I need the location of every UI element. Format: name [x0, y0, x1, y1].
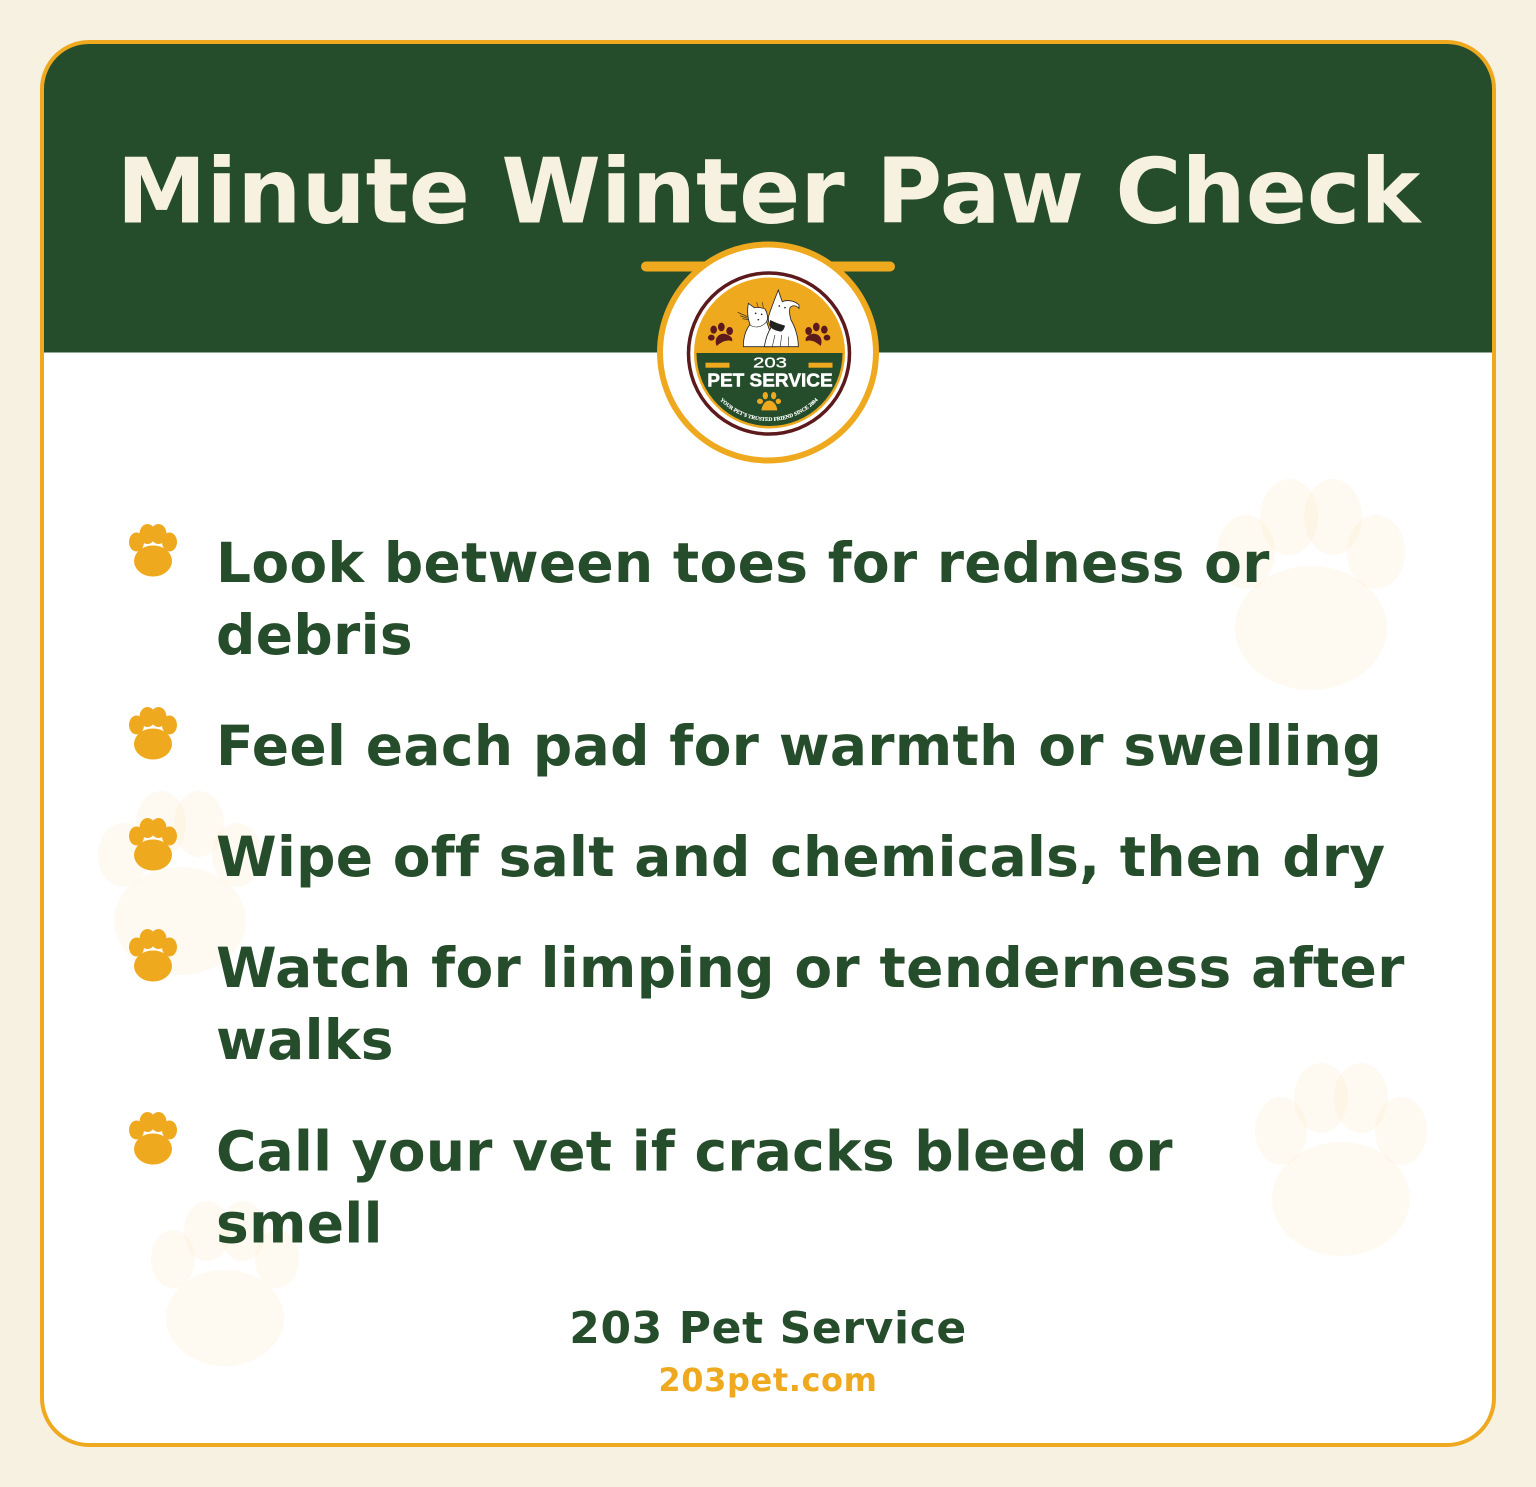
header band [42, 42, 1494, 352]
list item 4: walks [216, 1008, 394, 1072]
logo badge [657, 242, 879, 464]
item text: Look between toes for redness or [216, 531, 1270, 595]
title: Minute Winter Paw Check [117, 140, 1422, 244]
list item 3 [129, 818, 1385, 889]
list item 5: smell [216, 1192, 383, 1256]
item text: Wipe off salt and chemicals, then dry [216, 825, 1385, 889]
list item 2 [129, 707, 1382, 778]
logo: cat and dog [738, 290, 799, 347]
background paw: bottom left [151, 1201, 299, 1366]
footer brand name: 203 Pet Service [569, 1303, 967, 1354]
logo: bottom paw [757, 392, 781, 410]
item text: Call your vet if cracks bleed or [216, 1120, 1173, 1184]
title underline [641, 262, 895, 272]
logo: PET SERVICE: PET SERVICE [707, 370, 833, 391]
icon: paw bullet [129, 707, 177, 760]
logo: 203: 203 [753, 355, 787, 371]
logo: tagline: YOUR PET'S TRUSTED FRIEND SINCE 2004 [720, 398, 818, 422]
bullet list [129, 524, 1405, 1256]
list item 1: debris [216, 603, 413, 667]
list item 5 [129, 1112, 1173, 1256]
list item 4 [129, 929, 1405, 1072]
background paw: top right [1217, 479, 1405, 690]
logo: gold bars [706, 363, 832, 368]
footer website: 203pet.com [658, 1361, 878, 1399]
background paw: lower right [1255, 1063, 1427, 1256]
logo: right paw [805, 323, 830, 346]
icon: paw bullet [129, 1112, 177, 1164]
item text: Watch for limping or tenderness after [216, 936, 1405, 1000]
icon: paw bullet [129, 818, 177, 870]
icon: paw bullet [129, 524, 177, 576]
background paw: middle left [98, 791, 262, 975]
list item 1 [129, 524, 1270, 667]
logo: left paw [708, 323, 733, 346]
item text: Feel each pad for warmth or swelling [216, 714, 1382, 778]
icon: paw bullet [129, 929, 177, 982]
